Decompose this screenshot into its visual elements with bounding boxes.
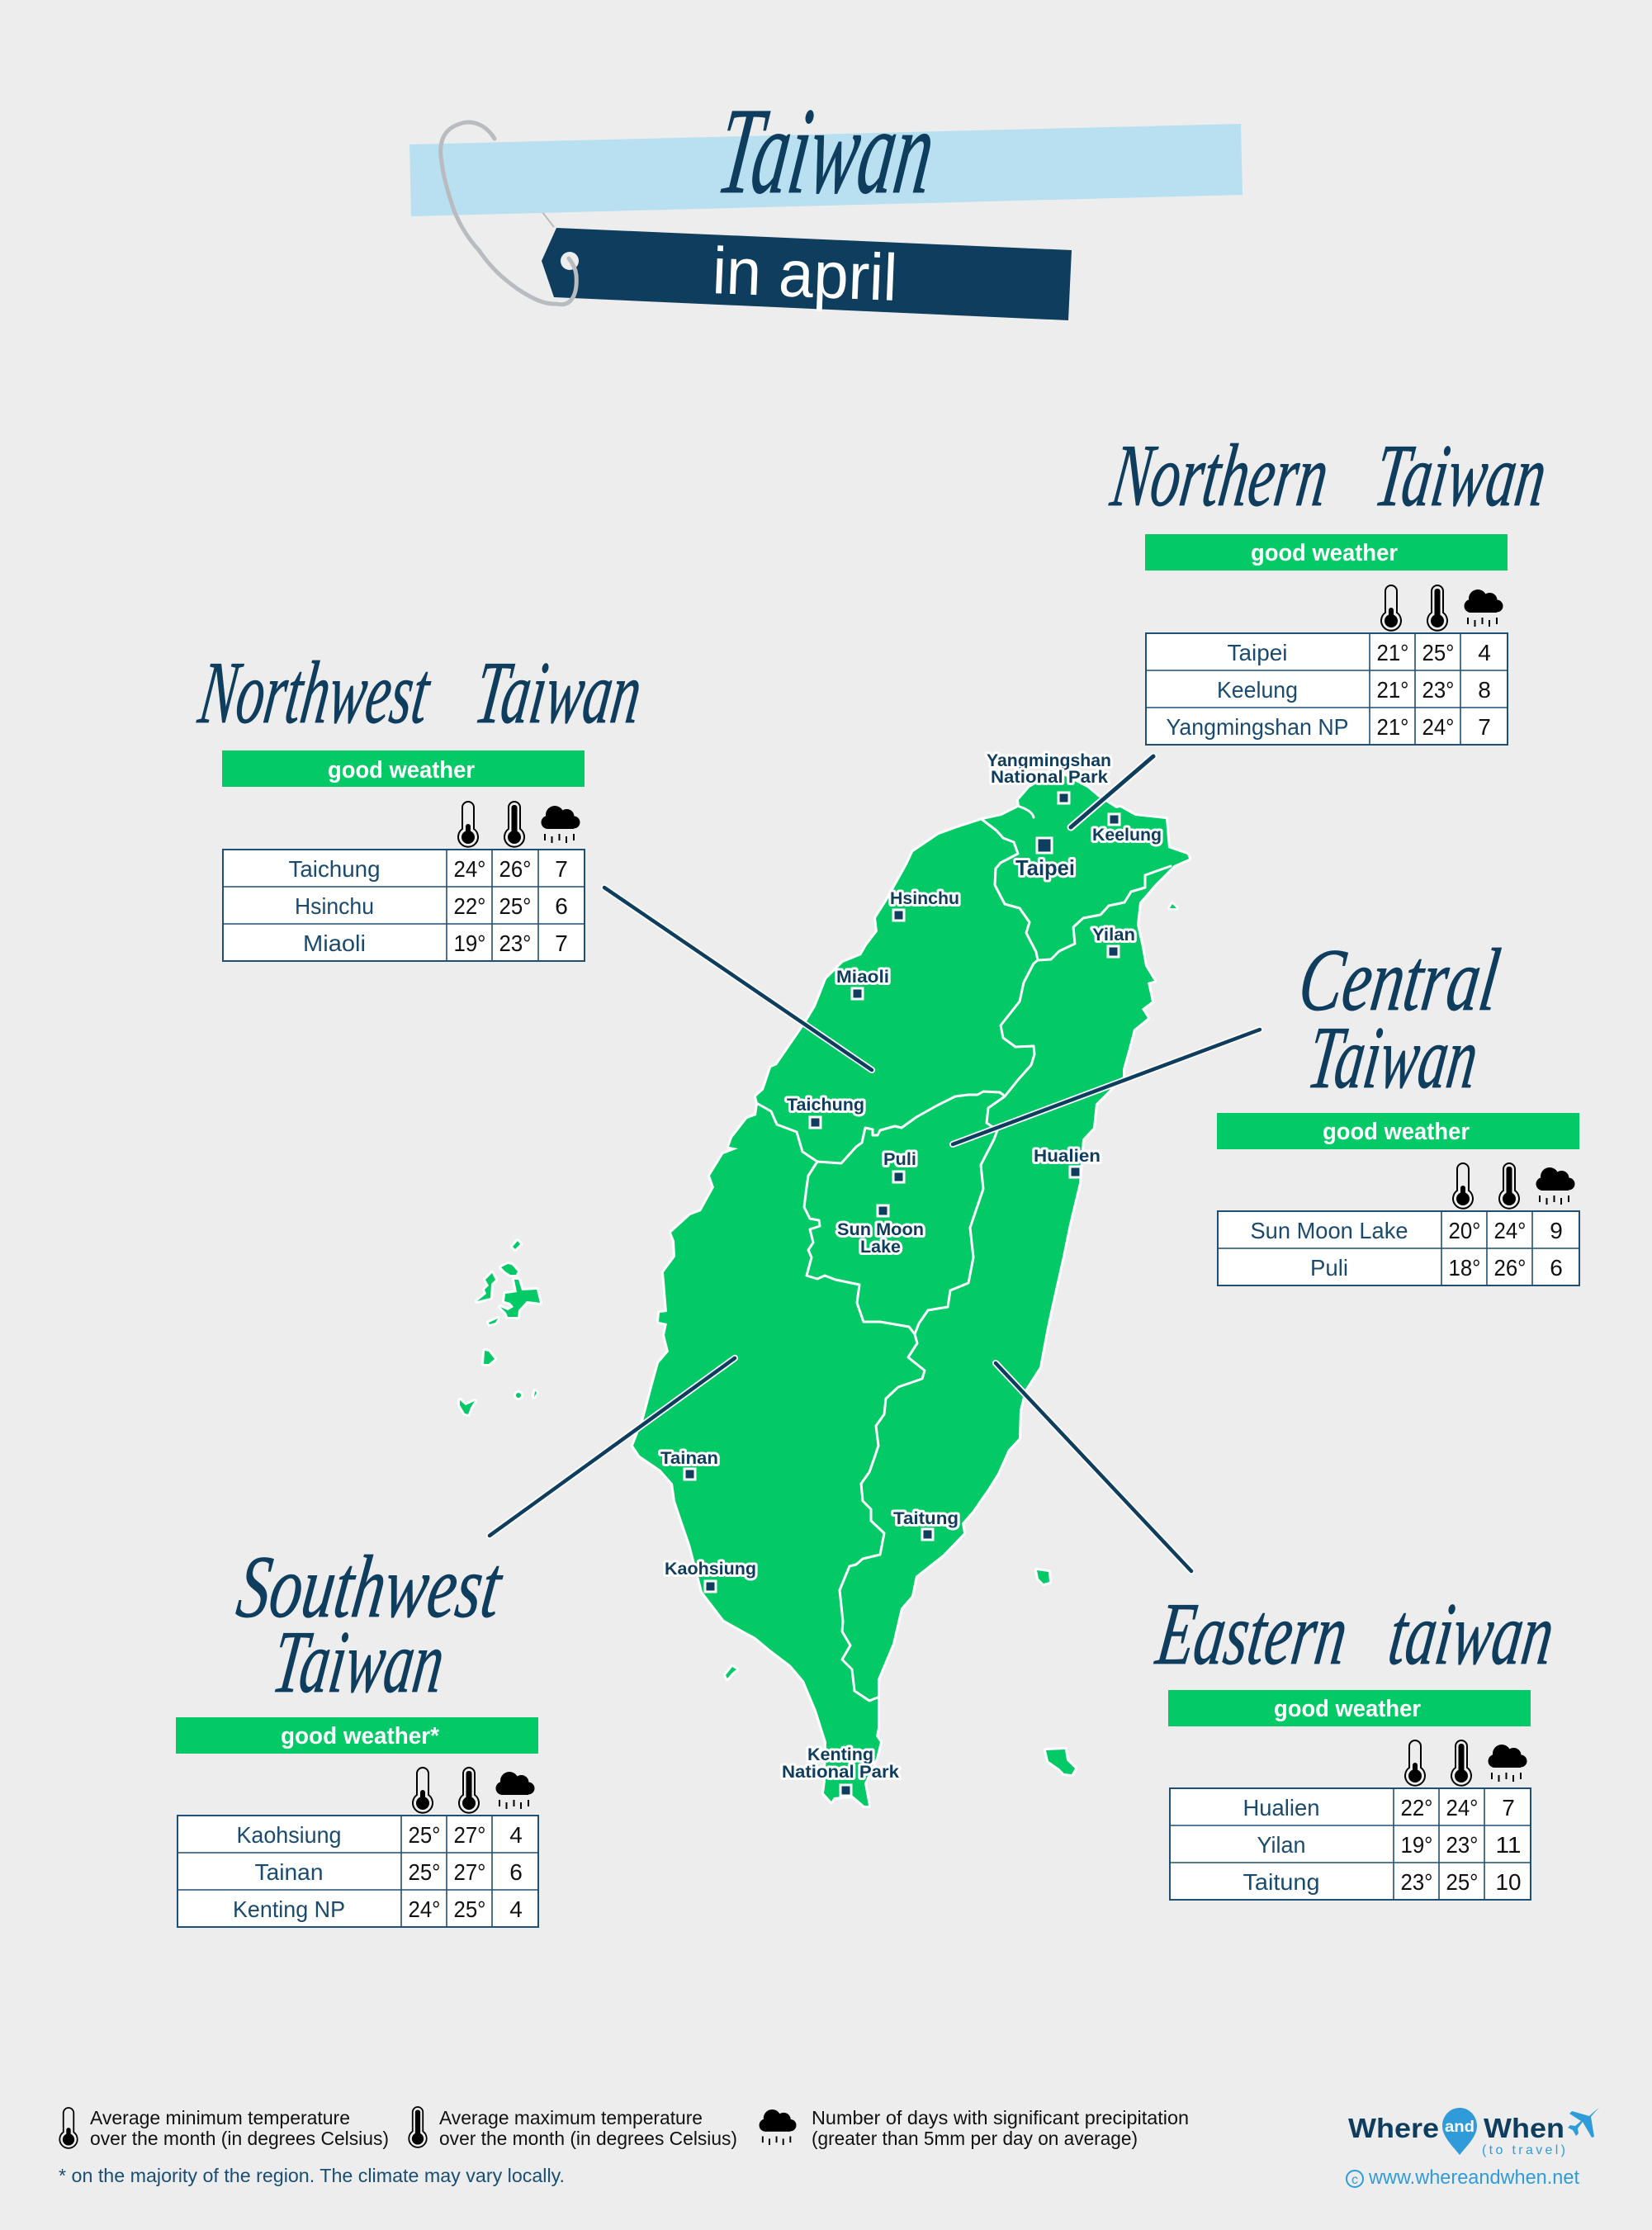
icons	[413, 1768, 535, 1813]
leader line: central	[953, 1030, 1260, 1144]
Tainan: Tainan	[660, 1449, 718, 1468]
title banner	[409, 83, 1243, 320]
Keelung	[1092, 814, 1162, 845]
Taipei	[1015, 838, 1075, 880]
table: 25°	[499, 893, 532, 919]
panel: Northern Taiwan	[1145, 534, 1508, 745]
Yangmingshan	[987, 751, 1111, 803]
Miaoli	[836, 968, 889, 999]
legend: maximum temperature: over the month (in degrees Celsius)	[439, 2128, 737, 2149]
icons	[1405, 1740, 1527, 1786]
table: 24°	[408, 1896, 441, 1922]
table: 4	[509, 1822, 523, 1848]
legend	[59, 2107, 1189, 2149]
Taitung	[893, 1509, 959, 1540]
table: 23°	[499, 930, 532, 956]
Hualien: Hualien	[1034, 1147, 1101, 1166]
panel: Central Taiwan	[1217, 1113, 1579, 1285]
table: Yilan	[1257, 1832, 1306, 1858]
Kenting: Kenting	[807, 1745, 873, 1764]
table: Miaoli	[303, 930, 366, 956]
table: 24°	[1446, 1795, 1478, 1820]
table: 22°	[1400, 1795, 1433, 1820]
Miaoli: Miaoli	[836, 968, 889, 987]
Kenting	[782, 1745, 899, 1796]
Penghu and offshore islands	[460, 904, 1176, 1774]
heading: Central Taiwan: Central	[1294, 930, 1505, 1030]
heading: Central Taiwan	[1294, 930, 1505, 1107]
table: 10	[1496, 1869, 1521, 1895]
rating bar: good weather	[1251, 540, 1398, 566]
leader line: northwest	[604, 888, 872, 1070]
rating bar	[1168, 1690, 1531, 1726]
table: Sun Moon Lake	[1250, 1218, 1408, 1243]
legend: maximum temperature: Average maximum temperature	[439, 2107, 703, 2128]
Puli	[883, 1150, 916, 1182]
table: Yangmingshan NP	[1166, 714, 1349, 740]
Taichung: Taichung	[787, 1096, 864, 1115]
legend: minimum temperature: over the month (in degrees Celsius)	[90, 2128, 389, 2149]
heading: Central Taiwan: Taiwan	[1303, 1008, 1484, 1107]
Tainan	[660, 1449, 718, 1480]
logo: Where and When: When	[1484, 2113, 1564, 2143]
rating bar	[1217, 1113, 1579, 1149]
footnote: * on the majority of the region. The climate may vary locally.	[59, 2165, 565, 2186]
table	[1218, 1211, 1579, 1285]
leader line: eastern	[996, 1363, 1191, 1571]
table: 26°	[1494, 1255, 1526, 1281]
table: 23°	[1422, 677, 1455, 703]
heading: Eastern Taiwan: taiwan	[1384, 1584, 1560, 1683]
Yilan: Yilan	[1092, 926, 1135, 945]
Taipei: Taipei	[1015, 855, 1075, 880]
table: 7	[555, 856, 568, 882]
tag hole	[561, 252, 579, 270]
table: 25°	[408, 1822, 441, 1848]
table: 21°	[1377, 714, 1408, 740]
rating bar	[222, 750, 585, 787]
table: 27°	[454, 1859, 485, 1885]
table: 27°	[454, 1822, 485, 1848]
table: Hualien	[1243, 1795, 1319, 1820]
heading: Northwest Taiwan: Taiwan	[470, 643, 647, 742]
heading: Southwest Taiwan: Southwest	[232, 1537, 509, 1636]
legend: maximum temperature	[409, 2107, 737, 2149]
Sun Moon Lake: Sun Moon	[837, 1220, 924, 1239]
legend: minimum temperature: Average minimum temperature	[90, 2107, 350, 2128]
table	[1170, 1788, 1531, 1900]
icon: map pin	[1442, 2108, 1477, 2155]
icon: plane	[1568, 2108, 1599, 2138]
table: Hsinchu	[295, 893, 374, 919]
ring	[441, 122, 576, 305]
heading: Southwest Taiwan	[232, 1537, 509, 1712]
logo: Where and When: and	[1445, 2119, 1474, 2136]
icons	[1453, 1163, 1575, 1209]
logo: Where and When	[1348, 2108, 1599, 2157]
heading: Northern Taiwan: Taiwan	[1370, 426, 1552, 525]
table: Keelung	[1217, 677, 1298, 703]
table: 8	[1478, 677, 1491, 703]
Hsinchu: Hsinchu	[890, 889, 959, 908]
heading: Southwest Taiwan: Taiwan	[267, 1612, 450, 1712]
rating bar: good weather*	[281, 1723, 440, 1749]
table: 7	[1478, 714, 1491, 740]
table: 25°	[454, 1896, 485, 1922]
rating bar: good weather	[1274, 1696, 1421, 1722]
table: 21°	[1377, 677, 1408, 703]
Keelung: Keelung	[1092, 826, 1162, 845]
table: Taitung	[1243, 1869, 1319, 1895]
logo: Where and When: Where	[1348, 2113, 1439, 2143]
table: 7	[1502, 1795, 1515, 1820]
Yangmingshan: National Park	[991, 768, 1108, 787]
Sun Moon Lake: Lake	[860, 1238, 901, 1257]
copyright and website: www.whereandwhen.net	[1368, 2166, 1579, 2189]
table: Kenting NP	[233, 1896, 345, 1922]
Hualien	[1034, 1147, 1101, 1177]
table: 7	[555, 930, 568, 956]
Taitung: Taitung	[893, 1509, 959, 1528]
table: Kaohsiung	[236, 1822, 342, 1848]
table: 4	[509, 1896, 523, 1922]
icons	[1381, 585, 1503, 631]
legend: minimum temperature	[59, 2107, 389, 2149]
main title: Taiwan	[710, 83, 943, 220]
leader line: northern	[1071, 756, 1153, 827]
Kaohsiung: Kaohsiung	[665, 1560, 756, 1579]
table: 20°	[1448, 1218, 1481, 1243]
table: 6	[509, 1859, 523, 1885]
logo: Where and When: (to travel)	[1482, 2143, 1565, 2157]
tag string behind strip	[542, 212, 554, 227]
Kenting: National Park	[782, 1763, 899, 1782]
subtitle: in april	[711, 234, 899, 315]
rating bar: good weather	[1323, 1119, 1470, 1145]
table: 24°	[1422, 714, 1455, 740]
light blue title strip	[409, 124, 1243, 216]
map of Taiwan	[460, 770, 1189, 1806]
table: 6	[1550, 1255, 1563, 1281]
table: 25°	[1422, 640, 1455, 665]
icons	[458, 802, 580, 847]
city labels	[660, 751, 1162, 1796]
table: 21°	[1377, 640, 1408, 665]
table: Tainan	[254, 1859, 324, 1885]
heading: Northwest Taiwan: Northwest	[193, 643, 437, 742]
rating bar	[176, 1717, 538, 1754]
table: Taipei	[1227, 640, 1288, 665]
table	[178, 1816, 538, 1927]
table: 23°	[1400, 1869, 1433, 1895]
heading: Northern Taiwan: Northern	[1105, 426, 1334, 525]
Taichung	[787, 1096, 864, 1128]
rating bar: good weather	[328, 757, 475, 784]
table: 26°	[499, 856, 532, 882]
table: 19°	[454, 930, 485, 956]
panel: Southwest Taiwan	[176, 1717, 538, 1927]
copyright and website: c	[1351, 2173, 1358, 2187]
Yilan	[1092, 926, 1135, 957]
table: 6	[555, 893, 568, 919]
navy luggage tag	[542, 228, 1072, 320]
table: 24°	[454, 856, 485, 882]
legend: precipitation: Number of days with significant precipitation	[812, 2107, 1189, 2128]
heading: Eastern Taiwan: Eastern	[1150, 1584, 1353, 1683]
table	[223, 850, 585, 961]
table: Taichung	[289, 856, 380, 882]
panel: Eastern Taiwan	[1168, 1690, 1531, 1900]
table: 9	[1550, 1218, 1563, 1243]
rating bar	[1145, 534, 1508, 571]
table: 23°	[1446, 1832, 1478, 1858]
Sun Moon Lake	[837, 1205, 924, 1257]
table: Puli	[1310, 1255, 1348, 1281]
table: 19°	[1400, 1832, 1433, 1858]
table: 11	[1496, 1832, 1521, 1858]
legend: precipitation: (greater than 5mm per day on average)	[812, 2128, 1138, 2149]
table: 22°	[454, 893, 485, 919]
Yangmingshan: Yangmingshan	[987, 751, 1111, 770]
table: 18°	[1448, 1255, 1481, 1281]
regional borders	[758, 807, 1171, 1701]
island outline	[633, 770, 1189, 1806]
table: 4	[1478, 640, 1491, 665]
leader line: southwest	[490, 1358, 735, 1536]
table: 24°	[1494, 1218, 1526, 1243]
Puli: Puli	[883, 1150, 916, 1169]
panel: Northwest Taiwan	[222, 750, 585, 961]
table	[1146, 633, 1508, 745]
legend: precipitation	[760, 2107, 1189, 2149]
Kaohsiung	[665, 1560, 756, 1592]
table: 25°	[1446, 1869, 1478, 1895]
table: 25°	[408, 1859, 441, 1885]
Hsinchu	[890, 889, 959, 921]
